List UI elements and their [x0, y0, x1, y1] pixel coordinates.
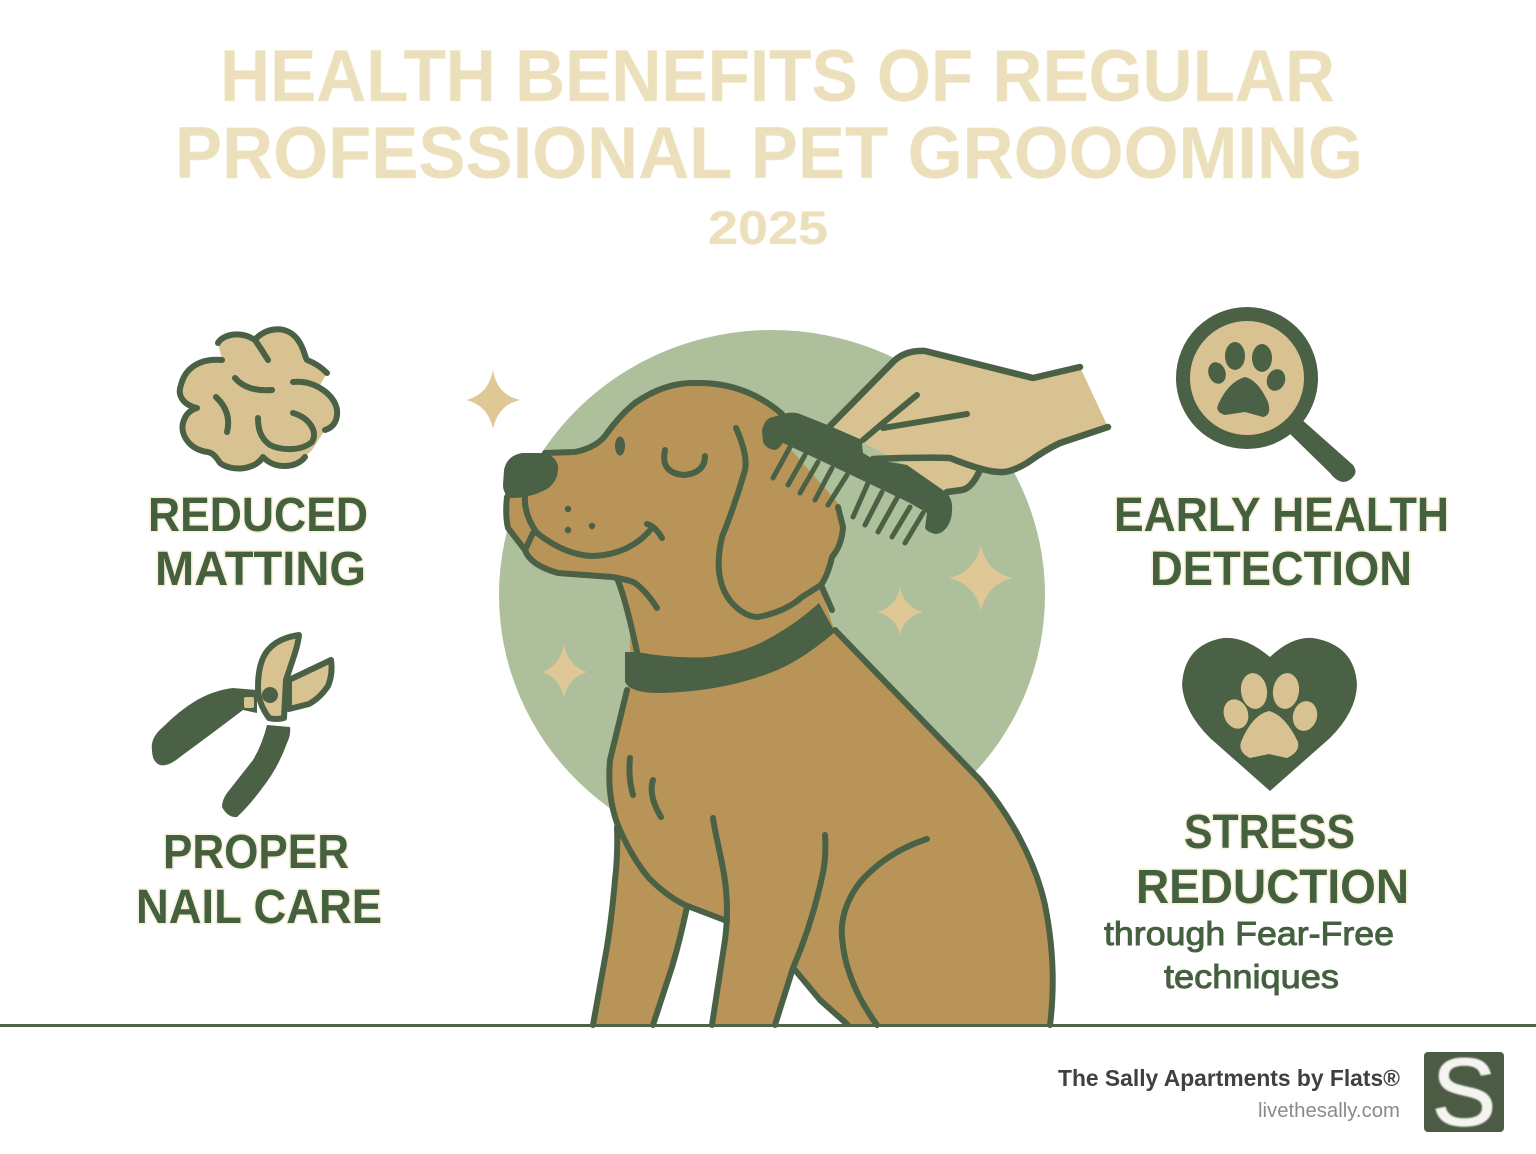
label: stress reduction	[1104, 806, 1409, 995]
illustration: dog	[503, 383, 1053, 1025]
label: early health detection: DETECTION	[1150, 543, 1412, 596]
label: proper nail care: PROPER	[163, 826, 349, 879]
icon: magnifying glass with paw	[1176, 307, 1356, 482]
sparkles	[466, 370, 1013, 698]
label: reduced matting: REDUCED	[148, 489, 368, 542]
dog body fill	[505, 383, 1053, 1025]
label: early health detection: EARLY HEALTH	[1114, 489, 1449, 542]
icon: matted fur	[180, 329, 337, 469]
label: stress reduction: techniques	[1164, 958, 1339, 995]
title: PROFESSIONAL PET GROOOMING	[175, 113, 1363, 194]
illustration: hand holding comb	[830, 351, 1108, 492]
label: reduced matting: MATTING	[155, 543, 366, 596]
label: early health detection	[1114, 489, 1449, 596]
footer brand text: livethesally.com	[1258, 1100, 1400, 1122]
icon: nail clippers	[152, 635, 332, 817]
dog outline	[506, 383, 1053, 1025]
footer brand text: The Sally Apartments by Flats®	[1058, 1065, 1400, 1091]
dog nose	[503, 453, 558, 498]
year subtitle: 2025	[708, 201, 828, 254]
illustration: comb	[762, 413, 952, 543]
title: HEALTH BENEFITS OF REGULAR	[220, 36, 1335, 117]
dog collar	[625, 603, 835, 693]
background circle	[499, 330, 1045, 860]
footer brand text	[1058, 1065, 1400, 1122]
icon: heart with paw	[1182, 638, 1357, 791]
label: proper nail care: NAIL CARE	[136, 881, 382, 934]
label: proper nail care	[136, 826, 382, 934]
dog face	[565, 436, 705, 533]
label: stress reduction: STRESS	[1184, 806, 1355, 859]
title	[175, 36, 1363, 194]
label: stress reduction: through Fear-Free	[1104, 915, 1394, 952]
label: reduced matting	[148, 489, 368, 596]
label: stress reduction: REDUCTION	[1136, 861, 1409, 914]
footer logo: S	[1432, 1039, 1496, 1146]
